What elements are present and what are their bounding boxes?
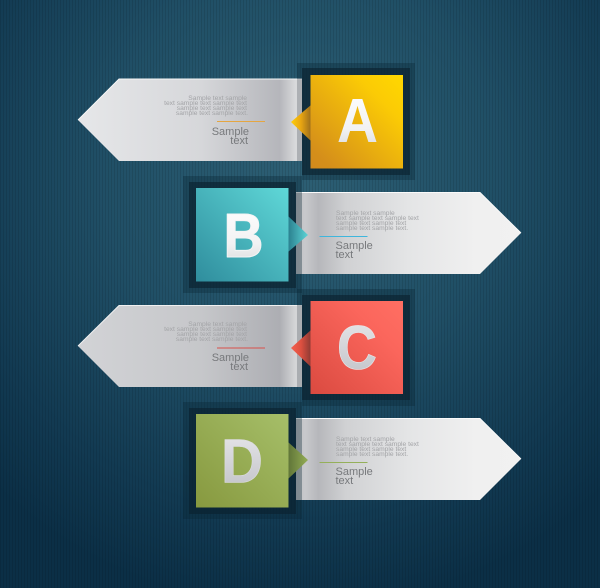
heading A: Sample (212, 126, 249, 138)
text block D (336, 436, 419, 458)
text block C: text sample text sample text (164, 326, 247, 333)
pointer B (288, 216, 308, 252)
letter C: C (337, 314, 377, 383)
heading C: Sample (212, 352, 249, 364)
frame inner B (189, 182, 296, 288)
accent line A (217, 121, 265, 122)
text block C: sample text sample text (177, 331, 247, 338)
arrow banner B (296, 192, 521, 274)
panel: B (183, 176, 521, 293)
pointer A (291, 105, 311, 141)
square B (196, 188, 288, 282)
square D (196, 414, 288, 508)
heading B: text (336, 249, 353, 261)
arrow banner C (78, 306, 302, 387)
frame inner D (189, 408, 296, 514)
heading B (336, 240, 373, 261)
panel: A (78, 63, 415, 180)
letter D: D (221, 428, 263, 496)
text block A: sample text sample text. (176, 110, 248, 117)
text block C (164, 321, 248, 343)
letter A: A (337, 87, 378, 156)
text block A: sample text sample text (177, 105, 247, 112)
frame inner C (302, 295, 410, 400)
heading C: text (230, 361, 248, 373)
heading D: text (336, 475, 353, 487)
heading D (336, 466, 373, 487)
heading A (212, 126, 249, 147)
heading A: text (230, 135, 248, 147)
square A (310, 75, 403, 168)
text block C: sample text sample text. (176, 336, 248, 343)
arrow banner D (296, 418, 521, 500)
accent line D (320, 462, 368, 463)
accent line C (217, 348, 265, 349)
frame A (297, 63, 415, 180)
panel: C (78, 289, 415, 406)
letter B: B (224, 202, 264, 271)
text block D: sample text sample text. (336, 451, 408, 458)
text block D: text sample text sample text (336, 441, 419, 448)
heading C (212, 352, 249, 373)
frame B (183, 176, 302, 293)
text block B: sample text sample text. (336, 225, 408, 232)
frame inner A (302, 68, 410, 175)
heading B: Sample (336, 240, 373, 252)
frame D (183, 402, 302, 519)
text block B (336, 210, 419, 232)
pointer D (288, 442, 308, 479)
text block D: sample text sample text (336, 446, 406, 453)
arrow banner A (78, 79, 302, 161)
text block B: Sample text sample (336, 210, 395, 217)
text block A: text sample text sample text (164, 100, 247, 107)
text block A (164, 95, 248, 117)
text block A: Sample text sample (188, 95, 247, 102)
text block B: sample text sample text (336, 220, 406, 227)
heading D: Sample (336, 466, 373, 478)
panel: D (183, 402, 521, 519)
frame C (297, 289, 415, 406)
text block B: text sample text sample text (336, 215, 419, 222)
text block D: Sample text sample (336, 436, 395, 443)
text block C: Sample text sample (188, 321, 247, 328)
pointer C (291, 330, 311, 367)
square C (310, 301, 403, 394)
accent line B (320, 236, 368, 237)
